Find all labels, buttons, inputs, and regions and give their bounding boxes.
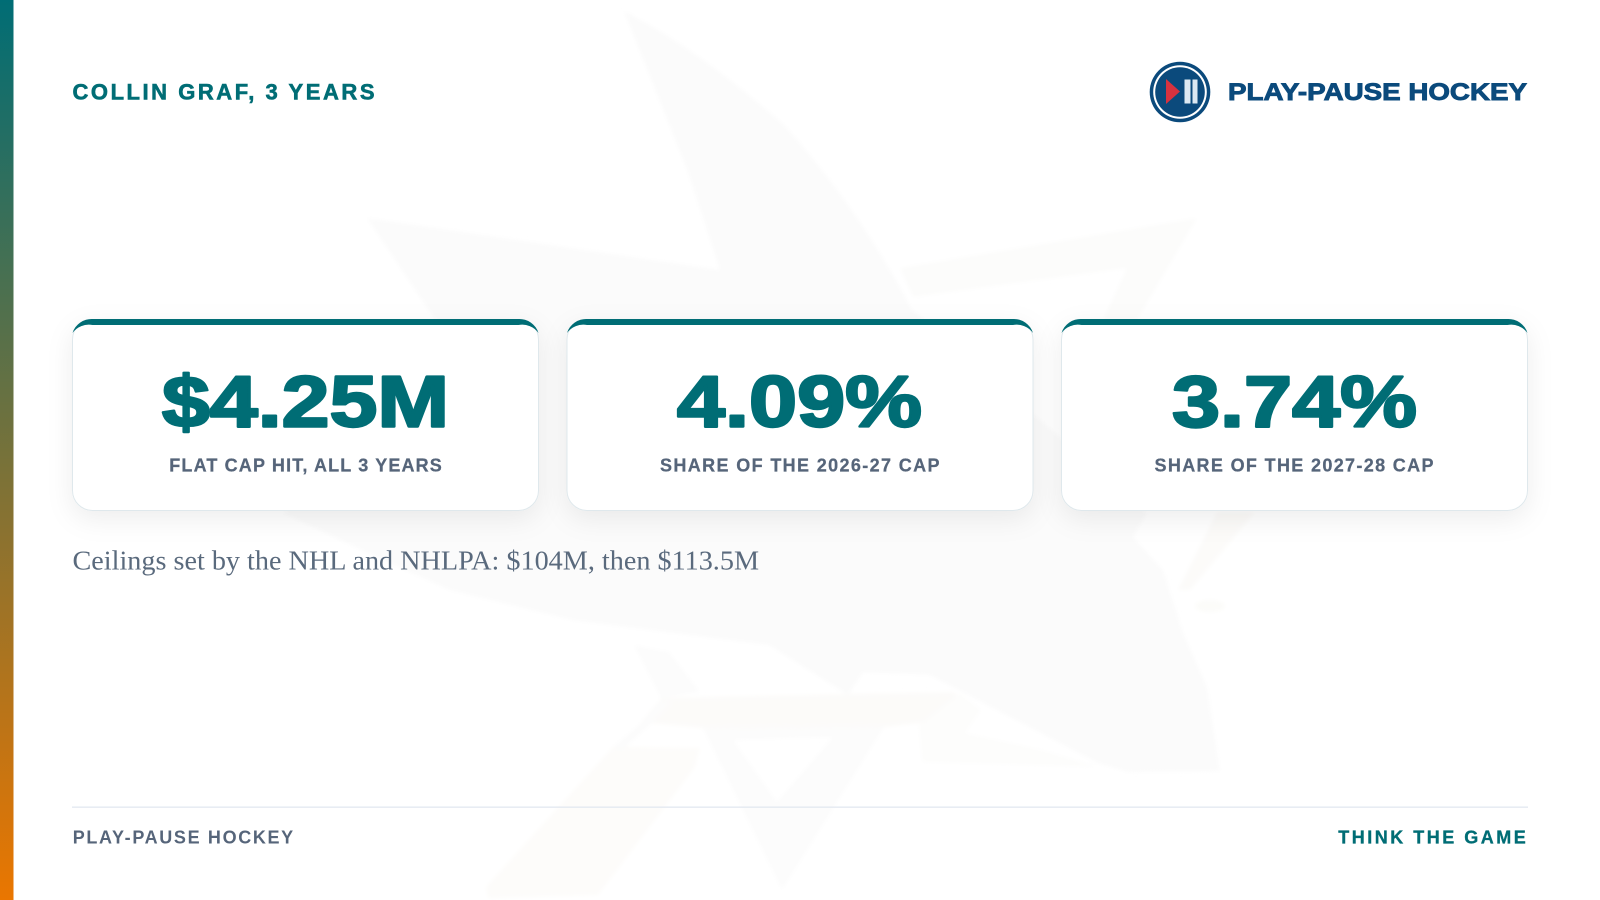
stat label: SHARE OF THE 2027-28 CAP — [1154, 456, 1434, 476]
caption: cap ceilings: Ceilings set by the NHL and NHLPA: $104M, then $113.5M — [72, 545, 759, 575]
panel: share of 2027-28 cap — [1062, 319, 1528, 510]
panel: share of 2026-27 cap — [567, 319, 1033, 510]
panel: flat cap hit — [72, 319, 538, 510]
stat value: $4.25M — [162, 362, 449, 442]
stat label: FLAT CAP HIT, ALL 3 YEARS — [169, 456, 442, 476]
footer divider — [72, 806, 1528, 808]
stat label: SHARE OF THE 2026-27 CAP — [660, 456, 940, 476]
header title: COLLIN GRAF, 3 YEARS — [72, 79, 374, 104]
brand logo — [1150, 62, 1527, 122]
icon: play-pause badge — [1150, 62, 1210, 122]
footer right text: THINK THE GAME — [1338, 827, 1526, 847]
footer left text: PLAY-PAUSE HOCKEY — [73, 827, 293, 847]
stat value: 4.09% — [677, 362, 922, 442]
left gradient bar — [0, 0, 14, 900]
brand name: PLAY-PAUSE HOCKEY — [1228, 79, 1527, 106]
watermark: shark logo — [283, 11, 1255, 898]
stat value: 3.74% — [1172, 362, 1417, 442]
